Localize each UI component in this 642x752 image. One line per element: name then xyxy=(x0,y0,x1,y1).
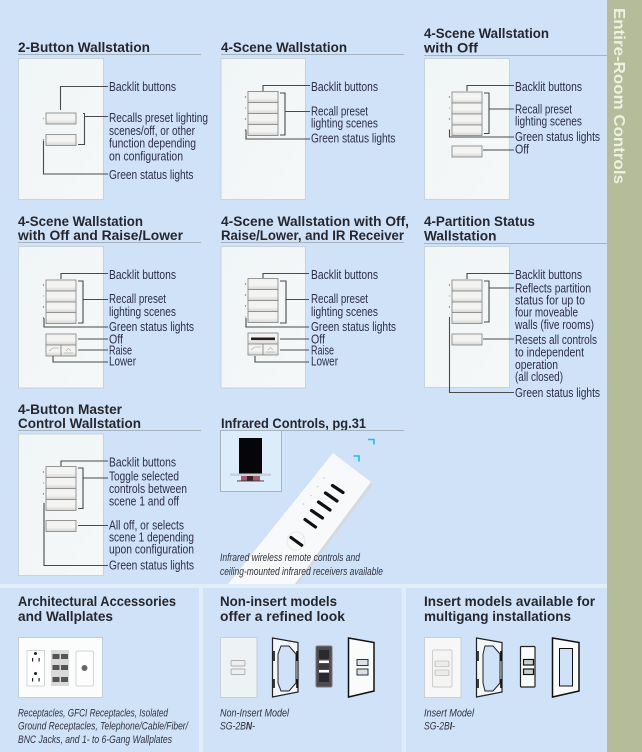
callout lines xyxy=(450,86,514,150)
divider band xyxy=(0,584,607,752)
callout labels: Recall preset xyxy=(515,102,572,116)
callout labels: Resets all controls xyxy=(515,333,597,347)
wallstation faceplate xyxy=(424,58,510,200)
faceplate xyxy=(348,638,374,697)
caption: SG-2BN- xyxy=(220,720,255,732)
callout labels: Off xyxy=(109,332,123,346)
callout labels: Backlit buttons xyxy=(311,268,378,282)
callout labels: lighting scenes xyxy=(311,116,378,130)
panel: 2-Button Wallstation xyxy=(18,40,208,200)
callout labels: Toggle selected xyxy=(109,470,179,484)
heading xyxy=(220,594,345,624)
heading: and Wallplates xyxy=(18,609,113,624)
heading: 4-Scene Wallstation with Off, xyxy=(221,214,409,229)
callout labels: Green status lights xyxy=(311,320,396,334)
wallstation faceplate xyxy=(18,434,104,576)
icon: infrared signal ticks xyxy=(354,440,374,462)
callout labels xyxy=(311,80,396,146)
panel: 4-Scene Wallstation xyxy=(221,40,404,200)
heading: 4-Scene Wallstation xyxy=(424,26,549,41)
callout labels: Backlit buttons xyxy=(515,268,582,282)
callout labels: Lower xyxy=(109,354,136,368)
wallstation faceplate xyxy=(18,58,104,200)
callout lines xyxy=(450,274,514,392)
wallstation faceplate xyxy=(18,246,104,388)
panel: 4-Scene Wallstation with Off, Raise/Lower, and IR Receiver xyxy=(221,214,409,388)
heading: multigang installations xyxy=(424,609,571,624)
heading: 4-Scene Wallstation xyxy=(18,214,143,229)
callout labels xyxy=(515,80,600,156)
callout labels: Recall preset xyxy=(109,292,166,306)
callout labels: Backlit buttons xyxy=(109,456,176,470)
callout lines xyxy=(246,86,310,139)
callout labels: Backlit buttons xyxy=(109,268,176,282)
heading: Wallstation xyxy=(424,228,496,244)
callout labels: Green status lights xyxy=(109,168,194,182)
callout labels: operation xyxy=(515,358,558,372)
heading xyxy=(221,214,409,243)
callout labels: four moveable xyxy=(515,306,578,320)
sidebar: Entire-Room Controls xyxy=(607,0,642,752)
panel: 4-Partition Status Wallstation xyxy=(424,214,607,400)
callout lines xyxy=(44,274,108,362)
callout labels: Raise xyxy=(109,344,132,358)
caption: Infrared wireless remote controls and xyxy=(220,552,361,564)
callout labels: Lower xyxy=(311,354,338,368)
callout labels: walls (five rooms) xyxy=(514,318,594,332)
heading xyxy=(424,594,596,624)
callout labels: status for up to xyxy=(515,294,585,308)
wallstation faceplate xyxy=(221,246,306,388)
caption: Ground Receptacles, Telephone/Cable/Fiber/ xyxy=(18,720,189,732)
caption: Insert Model xyxy=(424,708,474,720)
callout labels: upon configuration xyxy=(109,542,194,556)
heading: 4-Partition Status xyxy=(424,214,535,229)
panel: Architectural Accessories and Wallplates xyxy=(18,594,189,746)
callout labels: Off xyxy=(311,332,325,346)
callout labels: lighting scenes xyxy=(515,114,582,128)
callout lines xyxy=(44,86,108,174)
heading: 4-Scene Wallstation xyxy=(221,40,347,55)
heading: Infrared Controls, pg.31 xyxy=(221,416,366,431)
icon: infrared remote control xyxy=(228,453,372,584)
heading xyxy=(423,26,549,56)
icon: ceiling infrared receiver xyxy=(220,430,282,492)
heading: Control Wallstation xyxy=(18,416,141,431)
caption xyxy=(424,708,474,732)
heading xyxy=(18,594,176,624)
callout labels xyxy=(514,268,600,400)
faceplate xyxy=(552,638,579,697)
heading xyxy=(18,402,141,431)
callout lines xyxy=(246,274,309,362)
callout labels: Green status lights xyxy=(515,130,600,144)
callout labels: to independent xyxy=(515,346,584,360)
caption xyxy=(18,708,189,746)
caption: BNC Jacks, and 1- to 6-Gang Wallplates xyxy=(18,734,172,746)
callout labels: Raise xyxy=(311,344,334,358)
wallstation faceplate xyxy=(221,58,306,200)
callout labels xyxy=(311,268,396,368)
callout labels xyxy=(109,80,208,182)
insert wallstation xyxy=(424,638,461,698)
callout labels: All off, or selects xyxy=(109,518,184,532)
callout labels: on configuration xyxy=(109,150,183,164)
heading: Architectural Accessories xyxy=(18,594,176,609)
caption xyxy=(220,552,383,578)
callout labels: Recall preset xyxy=(311,104,368,118)
callout labels: Green status lights xyxy=(515,386,600,400)
panel: Infrared Controls xyxy=(220,416,404,584)
wallplate with receptacles and jacks xyxy=(18,638,102,698)
callout labels: scene 1 depending xyxy=(109,530,194,544)
callout labels: scene 1 and off xyxy=(109,494,179,508)
callout labels: Green status lights xyxy=(109,320,194,334)
caption xyxy=(220,708,289,732)
callout labels: Backlit buttons xyxy=(515,80,582,94)
callout lines xyxy=(44,461,108,566)
caption: Receptacles, GFCI Receptacles, Isolated xyxy=(18,708,169,720)
callout labels: function depending xyxy=(109,136,196,150)
panel: Insert models xyxy=(424,594,596,732)
non-insert wallstation xyxy=(220,638,257,698)
heading: offer a refined look xyxy=(220,609,345,624)
callout labels: Off xyxy=(515,142,529,156)
callout labels: controls between xyxy=(109,482,187,496)
callout labels xyxy=(109,268,194,368)
dimmer module xyxy=(316,646,332,687)
caption: Non-Insert Model xyxy=(220,708,289,720)
callout labels: lighting scenes xyxy=(109,305,176,319)
panel: 4-Scene Wallstation with Off xyxy=(423,26,607,200)
callout labels: Backlit buttons xyxy=(311,80,378,94)
heading: with Off and Raise/Lower xyxy=(17,228,184,243)
callout labels: Recall preset xyxy=(311,292,368,306)
callout labels: (all closed) xyxy=(515,370,563,384)
heading: Insert models available for xyxy=(424,594,596,609)
caption: ceiling-mounted infrared receivers available xyxy=(220,566,383,578)
panel: Non-insert models xyxy=(220,594,374,732)
heading: Raise/Lower, and IR Receiver xyxy=(221,228,405,243)
callout labels: Green status lights xyxy=(311,132,396,146)
heading xyxy=(17,214,184,243)
mounting frame xyxy=(476,638,502,697)
heading: with Off xyxy=(423,40,479,56)
callout labels: Recalls preset lighting xyxy=(109,111,208,125)
callout labels: lighting scenes xyxy=(311,305,378,319)
heading: 2-Button Wallstation xyxy=(18,40,150,55)
panel: 4-Scene Wallstation with Off and Raise/Lower xyxy=(17,214,201,388)
callout labels: scenes/off, or other xyxy=(109,124,195,138)
panel: 4-Button Master Control Wallstation xyxy=(18,402,201,576)
caption: SG-2BI- xyxy=(424,720,455,732)
wallstation faceplate xyxy=(424,246,510,388)
sidebar: Entire-Room Controls: Entire-Room Controls xyxy=(610,8,627,184)
callout labels: Green status lights xyxy=(109,558,194,572)
callout labels xyxy=(109,456,194,572)
heading xyxy=(424,214,535,244)
heading: Non-insert models xyxy=(220,594,337,609)
mounting frame xyxy=(272,638,298,697)
callout labels: Reflects partition xyxy=(515,282,591,296)
dimmer module xyxy=(520,646,535,687)
callout labels: Backlit buttons xyxy=(109,80,176,94)
heading: 4-Button Master xyxy=(18,402,123,417)
